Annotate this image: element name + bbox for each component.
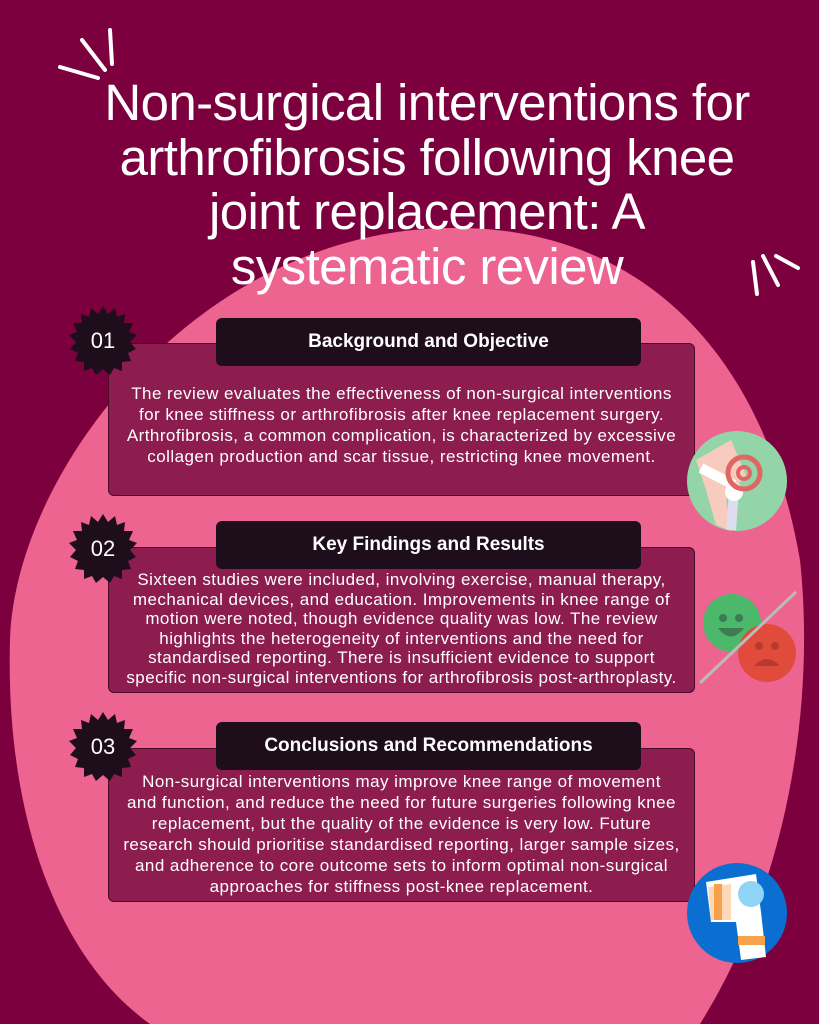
badge 02 xyxy=(69,514,137,583)
heading: key findings: Key Findings and Results xyxy=(312,534,545,555)
panel: key findings: standardised reporting. There is insufficient evidence to support xyxy=(148,648,655,667)
panel: conclusions: and function, and reduce the need for future surgeries following knee xyxy=(127,793,676,812)
title: joint replacement: A xyxy=(209,183,645,240)
title xyxy=(104,74,750,294)
panel: conclusions: and adherence to core outcome sets to inform optimal non-surgical xyxy=(135,856,668,875)
badge 01: 01 xyxy=(91,328,115,353)
panel: key findings: mechanical devices, and education. Improvements in knee range of xyxy=(133,590,670,609)
badge 03: 03 xyxy=(91,734,115,759)
panel: key findings: highlights the heterogeneity of interventions and the need for xyxy=(159,629,644,648)
badge 02: 02 xyxy=(91,536,115,561)
heading: background: Background and Objective xyxy=(308,331,549,352)
panel: conclusions xyxy=(108,748,695,902)
panel: conclusions: replacement, but the quality of the evidence is very low. Future xyxy=(152,814,651,833)
heading: conclusions xyxy=(216,722,641,770)
panel: background: collagen production and scar tissue, restricting knee movement. xyxy=(147,447,656,466)
title: systematic review xyxy=(231,238,623,294)
panel: background: Arthrofibrosis, a common complication, is characterized by excessive xyxy=(127,426,676,445)
title: arthrofibrosis following knee xyxy=(120,128,734,186)
panel: background: for knee stiffness or arthrofibrosis after knee replacement surgery. xyxy=(139,405,664,424)
icon: happy/sad faces xyxy=(699,591,797,684)
panel: key findings: Sixteen studies were included, involving exercise, manual therapy, xyxy=(137,570,666,589)
panel: conclusions: Non-surgical interventions may improve knee range of movement xyxy=(142,772,661,791)
panel: key findings: motion were noted, though evidence quality was low. The review xyxy=(145,609,658,628)
panel: key findings xyxy=(108,547,695,693)
title: Non-surgical interventions for xyxy=(104,74,750,131)
heading: conclusions: Conclusions and Recommendations xyxy=(264,735,593,756)
icon: knee brace xyxy=(687,863,787,963)
panel: conclusions: approaches for stiffness post-knee replacement. xyxy=(210,877,593,896)
heading: background xyxy=(216,318,641,366)
icon: knee target xyxy=(687,431,787,531)
heading: key findings xyxy=(216,521,641,569)
panel: conclusions: research should prioritise standardised reporting, larger sample sizes, xyxy=(123,835,680,854)
panel: background xyxy=(108,343,695,496)
panel: key findings: specific non-surgical interventions for arthrofibrosis post-arthroplasty. xyxy=(126,668,677,687)
badge 03 xyxy=(69,712,137,781)
panel: background: The review evaluates the effectiveness of non-surgical interventions xyxy=(131,384,672,403)
badge 01 xyxy=(69,306,137,375)
